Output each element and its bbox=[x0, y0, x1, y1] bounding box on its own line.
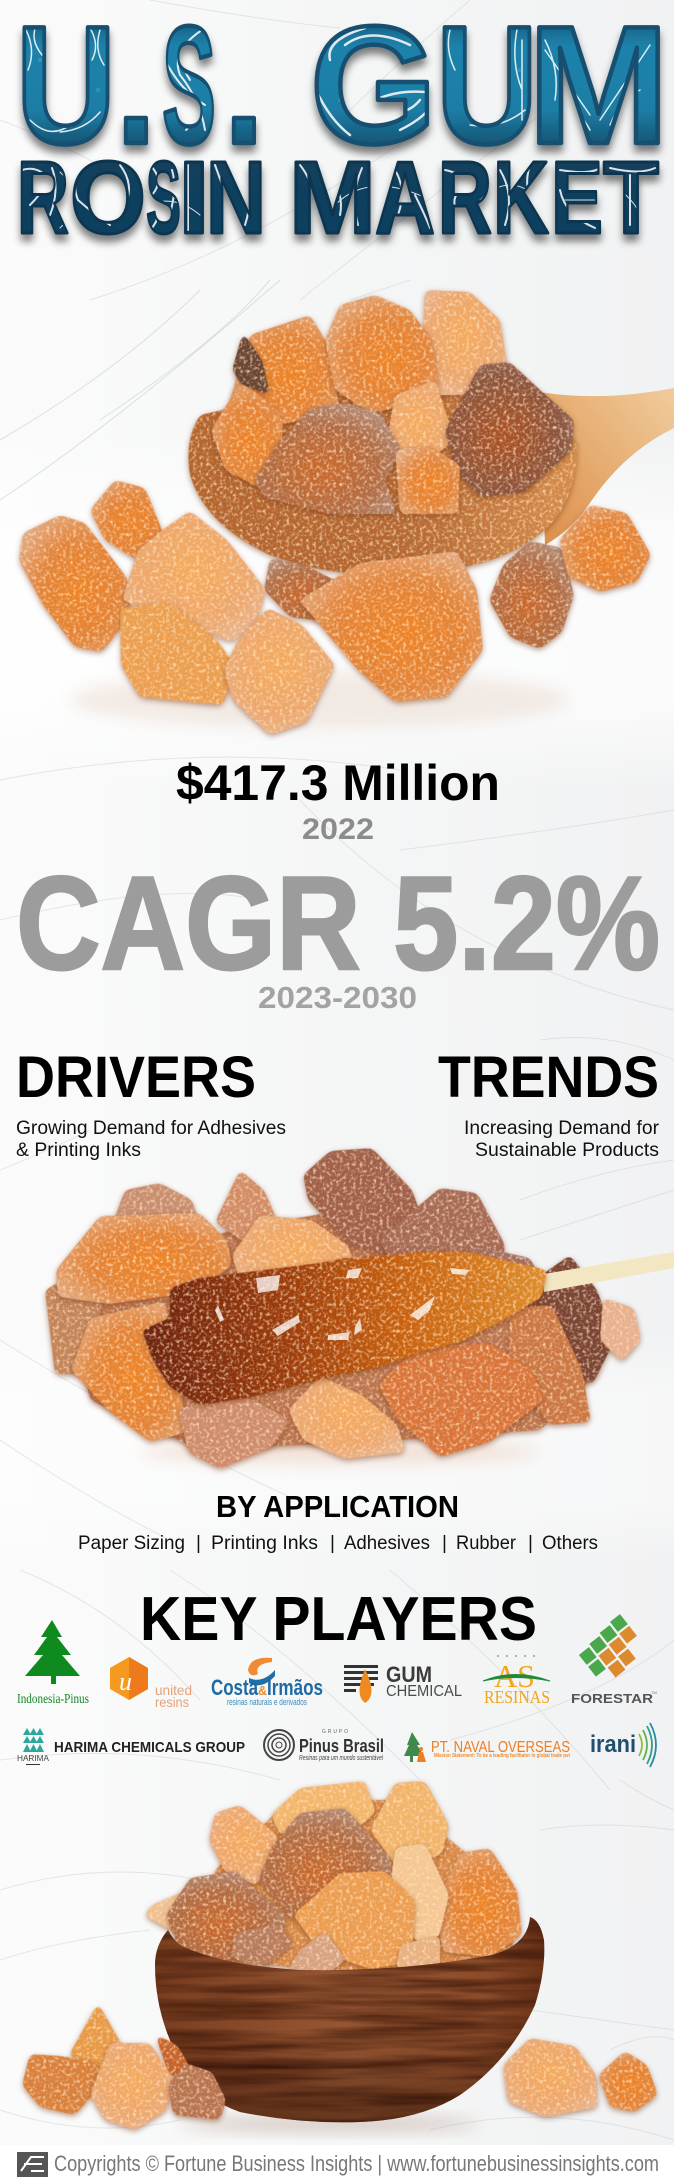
base year: 2022 bbox=[302, 813, 374, 846]
logo: Irani: irani bbox=[590, 1731, 636, 1758]
logo: United Resins bbox=[110, 1657, 192, 1710]
panel: drivers bbox=[16, 1045, 286, 1161]
title line 2: N bbox=[206, 140, 266, 255]
panel: key player logos bbox=[17, 1614, 657, 1767]
drivers text: & Printing Inks bbox=[16, 1140, 141, 1161]
footer bbox=[0, 2145, 674, 2184]
application segments: Others bbox=[542, 1533, 598, 1554]
logo: Pinus Brasil: GRUPO bbox=[322, 1729, 348, 1735]
logo: PT Naval Overseas: PT. NAVAL OVERSEAS bbox=[431, 1739, 570, 1756]
logo: AS Resinas bbox=[483, 1655, 550, 1707]
application segments: Printing Inks bbox=[211, 1533, 318, 1554]
rosin mound in bowl bbox=[200, 1800, 515, 1975]
forecast period: 2023-2030 bbox=[258, 980, 417, 1015]
rosin chunks in spoon bbox=[211, 290, 574, 514]
logo: Gum Chemical bbox=[344, 1662, 462, 1703]
title line 2: R bbox=[438, 140, 492, 255]
application segments: | bbox=[196, 1533, 201, 1554]
photo: rosin in wooden spoon bbox=[19, 290, 674, 735]
crystal cluster on stick bbox=[142, 1252, 547, 1405]
candy stick bbox=[544, 1252, 674, 1292]
title line 2: I bbox=[178, 140, 210, 255]
logo: Irani bbox=[590, 1723, 656, 1767]
bowl shading bbox=[155, 1917, 544, 2122]
title: U.S. Gum Rosin Market bbox=[16, 0, 669, 179]
logo: AS Resinas: AS bbox=[494, 1658, 535, 1694]
icon: Fortune Business Insights logo bbox=[17, 2152, 48, 2177]
crystal highlights bbox=[215, 1268, 470, 1340]
drivers text: Growing Demand for Adhesives bbox=[16, 1118, 286, 1139]
application segments: Rubber bbox=[456, 1533, 517, 1554]
logo: Harima Chemicals Group: HARIMA CHEMICALS GROUP bbox=[54, 1739, 245, 1756]
logo: Costa & Irmãos bbox=[211, 1658, 323, 1707]
logo: Costa & Irmãos: & bbox=[258, 1683, 267, 1698]
crystal backing mass bbox=[70, 1200, 600, 1450]
logo: Pinus Brasil: Resinas para um mundo sustentável bbox=[299, 1755, 383, 1762]
application segments: Adhesives bbox=[344, 1533, 430, 1554]
application segments: | bbox=[330, 1533, 335, 1554]
logo: Gum Chemical: GUM bbox=[386, 1662, 432, 1687]
market size value: $417.3 Million bbox=[176, 755, 500, 811]
trends heading: TRENDS bbox=[438, 1045, 659, 1110]
by application heading: BY APPLICATION bbox=[216, 1489, 459, 1524]
drivers heading: DRIVERS bbox=[16, 1045, 256, 1110]
trends text: Increasing Demand for bbox=[464, 1118, 660, 1139]
logo: Costa & Irmãos: resinas naturais e derivados bbox=[227, 1697, 307, 1707]
logo: Pinus Brasil bbox=[264, 1729, 384, 1762]
photo: rosin crystals and candy stick bbox=[45, 1148, 674, 1469]
logo: United Resins: u bbox=[119, 1667, 132, 1696]
logo: Indonesia-Pinus bbox=[17, 1620, 89, 1707]
wooden bowl bbox=[155, 1917, 544, 2122]
application segments: | bbox=[442, 1533, 447, 1554]
logo: AS Resinas: RESINAS bbox=[484, 1687, 550, 1707]
logo: Harima Chemicals Group: HARIMA bbox=[17, 1754, 50, 1763]
application segments: | bbox=[528, 1533, 533, 1554]
logo: PT Naval Overseas bbox=[404, 1732, 570, 1762]
panel: trends bbox=[438, 1045, 660, 1161]
logo: Costa & Irmãos: Irmãos bbox=[267, 1675, 323, 1700]
photo: rosin in wooden bowl bbox=[22, 1781, 658, 2131]
application segments: Paper Sizing bbox=[78, 1533, 185, 1554]
logo: Indonesia-Pinus: Indonesia-Pinus bbox=[17, 1692, 89, 1707]
logo: Costa & Irmãos: Costa bbox=[211, 1675, 259, 1700]
rosin chunks on table bbox=[19, 480, 651, 735]
logo: United Resins: united bbox=[155, 1682, 192, 1698]
logo: Forestar bbox=[571, 1614, 657, 1706]
rosin chunks left of bowl bbox=[22, 2003, 226, 2130]
key players heading: KEY PLAYERS bbox=[140, 1585, 537, 1654]
logo: United Resins: resins bbox=[155, 1694, 189, 1710]
rosin chunks above bowl rim bbox=[144, 1781, 522, 1972]
rosin chunks right of bowl bbox=[503, 2038, 658, 2117]
trends text: Sustainable Products bbox=[475, 1140, 659, 1161]
logo: Pinus Brasil: Pinus Brasil bbox=[299, 1736, 384, 1756]
spoon handle bbox=[540, 388, 674, 545]
logo: Gum Chemical: CHEMICAL bbox=[386, 1683, 462, 1700]
spoon bowl bbox=[188, 370, 577, 575]
logo: Harima Chemicals Group bbox=[17, 1728, 245, 1765]
title line 2: O bbox=[70, 140, 146, 255]
logo: PT Naval Overseas: Mission Statement: To be a leading facilitator in global trade pvt bbox=[434, 1753, 570, 1759]
title line 2 bbox=[17, 140, 659, 255]
title line 2: A bbox=[375, 140, 435, 255]
loose crystals bbox=[45, 1148, 641, 1469]
title line 2: S bbox=[146, 140, 181, 255]
logo: Forestar: FORESTAR bbox=[571, 1691, 654, 1706]
title line 2: E bbox=[551, 140, 603, 255]
logo: Forestar: TM bbox=[651, 1690, 657, 1695]
title line 2: M bbox=[289, 140, 376, 255]
title line 2: T bbox=[603, 140, 659, 255]
title line 2: R bbox=[17, 140, 69, 255]
title line 2: K bbox=[493, 140, 549, 255]
